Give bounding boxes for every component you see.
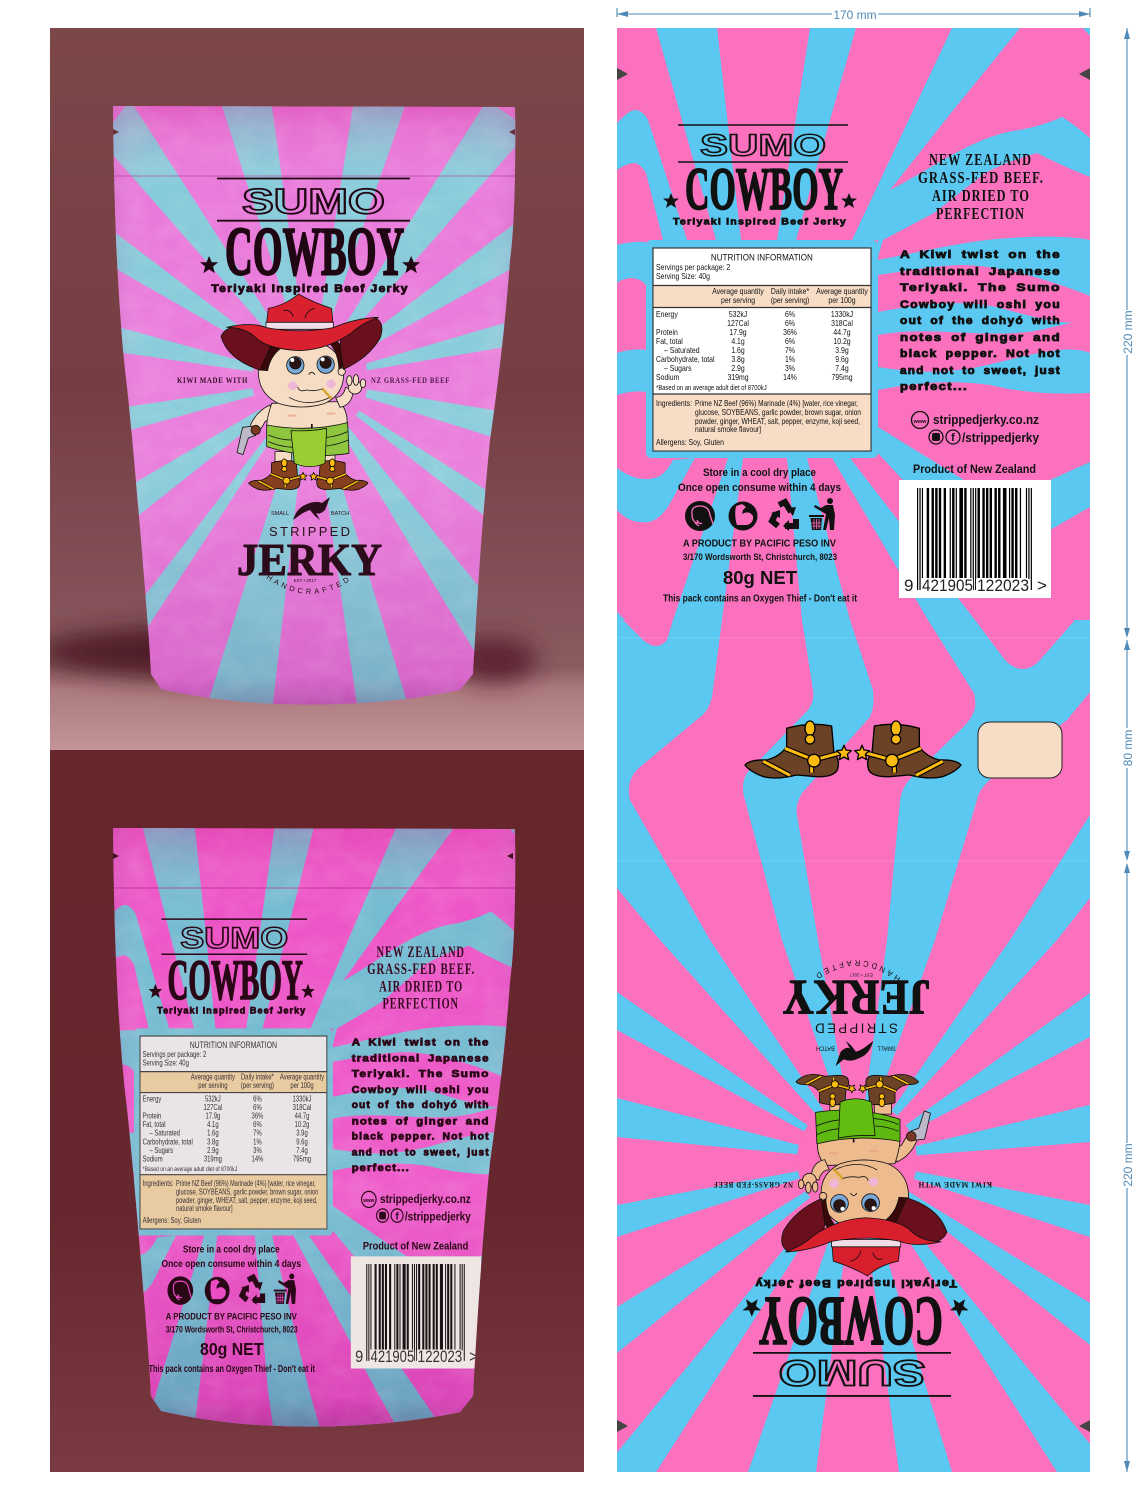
nutrition panel: – Sugars bbox=[664, 363, 692, 373]
headline: GRASS-FED BEEF. bbox=[367, 961, 475, 978]
nutrition panel: 1% bbox=[253, 1139, 262, 1147]
nutrition panel: – Sugars bbox=[149, 1147, 174, 1155]
company and weight: This pack contains an Oxygen Thief - Don't eat it bbox=[663, 594, 857, 604]
nutrition panel: 1330kJ bbox=[292, 1096, 312, 1104]
logo: Sumo Cowboy inverted bbox=[742, 1277, 969, 1396]
company and weight: A PRODUCT BY PACIFIC PESO INV bbox=[683, 538, 836, 550]
origin label: Product of New Zealand bbox=[913, 464, 1036, 476]
nutrition panel: 4.1g bbox=[207, 1122, 219, 1129]
logo: SUMO bbox=[180, 922, 288, 954]
company and weight: 3/170 Wordsworth St, Christchurch, 8023 bbox=[683, 552, 837, 563]
nutrition panel: Protein bbox=[656, 327, 678, 337]
tagline right: NZ GRASS-FED BEEF bbox=[371, 375, 450, 385]
upside-down front artwork bbox=[713, 960, 992, 1397]
nutrition panel: Sodium bbox=[656, 372, 679, 382]
web and social: www bbox=[362, 1199, 374, 1204]
company and weight: This pack contains an Oxygen Thief - Don't eat it bbox=[149, 1363, 315, 1374]
web and social: strippedjerky.co.nz bbox=[933, 412, 1039, 427]
icons: kiwi, muscle, recycle, bin bbox=[167, 1274, 296, 1305]
storage text bbox=[161, 1244, 302, 1270]
nutrition panel: 318Cal bbox=[293, 1104, 312, 1112]
nutrition panel: per serving bbox=[198, 1083, 228, 1091]
headline: PERFECTION bbox=[383, 995, 459, 1013]
description: Teriyaki. The Sumo bbox=[352, 1068, 490, 1080]
height dimension: 220 / 80 / 220 mm: 80 mm bbox=[1121, 730, 1135, 766]
logo: Sumo Cowboy inverted: SUMO bbox=[779, 1352, 925, 1393]
nutrition panel: 532kJ bbox=[729, 309, 747, 319]
logo: Stripped Jerky: JERKY bbox=[237, 534, 382, 585]
logo: Stripped Jerky: EST • 2017 bbox=[294, 578, 317, 583]
description bbox=[352, 1037, 490, 1174]
blank peach label bbox=[978, 722, 1062, 778]
description: A Kiwi twist on the bbox=[352, 1037, 490, 1049]
description: black pepper. Not hot bbox=[900, 348, 1061, 360]
character: baby sumo cowboy bbox=[221, 294, 382, 490]
nutrition panel: Energy bbox=[143, 1096, 162, 1104]
headline: GRASS-FED BEEF. bbox=[918, 168, 1044, 187]
nutrition panel: 3% bbox=[785, 363, 795, 373]
headline bbox=[368, 946, 474, 1008]
description: Teriyaki. The Sumo bbox=[900, 282, 1061, 294]
nutrition panel: Prime NZ Beef (96%) Marinade (4%) [water, rice vinegar, bbox=[176, 1180, 316, 1188]
nutrition panel: 6% bbox=[253, 1122, 262, 1129]
nutrition panel: 9.6g bbox=[835, 354, 849, 364]
logo: Stripped Jerky: STRIPPED bbox=[269, 524, 350, 539]
description: traditional Japanese bbox=[352, 1053, 490, 1065]
width dimension: 170 mm: 170 mm bbox=[833, 8, 877, 22]
height dimension: 220 / 80 / 220 mm bbox=[1121, 28, 1135, 1472]
logo: Stripped Jerky inverted: SMALL bbox=[877, 1044, 896, 1050]
nutrition panel: (per serving) bbox=[241, 1083, 274, 1091]
company and weight bbox=[149, 1311, 315, 1374]
company and weight: 80g NET bbox=[723, 567, 798, 588]
wavy rays artwork bbox=[109, 827, 515, 1437]
barcode: 9 bbox=[904, 576, 913, 595]
storage text: Once open consume within 4 days bbox=[678, 482, 841, 494]
company and weight bbox=[663, 538, 857, 604]
nutrition panel: Daily intake* bbox=[771, 286, 809, 296]
logo: Stripped Jerky inverted: HANDCRAFTED bbox=[816, 960, 900, 980]
barcode: 122023 bbox=[418, 1348, 462, 1366]
character inverted bbox=[782, 1075, 947, 1276]
logo: COWBOY bbox=[167, 949, 303, 1012]
headline: PERFECTION bbox=[936, 204, 1025, 223]
nutrition panel: Average quantity bbox=[816, 286, 868, 296]
web and social: /strippedjerky bbox=[405, 1210, 471, 1223]
nutrition panel bbox=[653, 248, 871, 451]
tagline inverted: NZ GRASS-FED BEEF bbox=[713, 1180, 793, 1190]
notch marks bbox=[617, 68, 1090, 1432]
logo: Stripped Jerky inverted: EST • 2017 bbox=[849, 971, 873, 977]
sunburst rays bbox=[97, 100, 531, 712]
nutrition panel: NUTRITION INFORMATION bbox=[711, 252, 813, 263]
nutrition panel: 3% bbox=[253, 1147, 262, 1155]
logo: Sumo Cowboy: SUMO bbox=[242, 182, 385, 221]
nutrition panel: 319mg bbox=[204, 1156, 222, 1164]
description: notes of ginger and bbox=[352, 1116, 490, 1128]
nutrition panel: 3.9g bbox=[835, 345, 849, 355]
nutrition panel: 795mg bbox=[831, 372, 853, 382]
nutrition panel: Servings per package: 2 bbox=[143, 1051, 206, 1059]
description: Cowboy will oshi you bbox=[352, 1085, 490, 1096]
nutrition panel: 14% bbox=[252, 1156, 263, 1164]
headline bbox=[918, 150, 1044, 223]
back label artwork bbox=[653, 125, 1061, 604]
web and social: f bbox=[396, 1211, 399, 1223]
nutrition panel: 7.4g bbox=[296, 1147, 308, 1155]
nutrition panel: Ingredients: bbox=[143, 1180, 174, 1188]
nutrition panel: 14% bbox=[783, 372, 797, 382]
back bag pouch bbox=[100, 820, 530, 1440]
logo: Stripped Jerky inverted: STRIPPED bbox=[815, 1020, 898, 1036]
nutrition panel: 532kJ bbox=[205, 1096, 221, 1104]
nutrition panel: glucose, SOYBEANS, garlic powder, brown sugar, onion bbox=[176, 1189, 318, 1197]
description: perfect... bbox=[352, 1162, 410, 1174]
nutrition panel: per serving bbox=[721, 295, 755, 305]
logo: COWBOY bbox=[685, 156, 843, 222]
barcode: > bbox=[469, 1348, 478, 1366]
nutrition panel: 10.2g bbox=[833, 336, 851, 346]
logo bbox=[149, 919, 315, 1016]
nutrition panel: 7% bbox=[253, 1130, 262, 1138]
nutrition panel: 1% bbox=[785, 354, 795, 364]
logo: Stripped Jerky: BATCH bbox=[331, 511, 349, 517]
description: and not to sweet, just bbox=[352, 1147, 490, 1159]
nutrition panel: 127Cal bbox=[727, 318, 749, 328]
nutrition panel: *Based on an average adult diet of 8700kJ bbox=[143, 1166, 237, 1173]
headline: AIR DRIED TO bbox=[932, 186, 1030, 205]
description: black pepper. Not hot bbox=[352, 1131, 490, 1143]
nutrition panel: 127Cal bbox=[204, 1104, 223, 1112]
notches bbox=[113, 129, 515, 135]
nutrition panel: glucose, SOYBEANS, garlic powder, brown sugar, onion bbox=[695, 407, 861, 417]
nutrition panel: 6% bbox=[785, 336, 795, 346]
nutrition panel: Allergens: Soy, Gluten bbox=[143, 1218, 201, 1225]
sunburst rays bottom panel bbox=[601, 940, 1113, 1472]
storage text: Store in a cool dry place bbox=[703, 467, 816, 479]
nutrition panel: powder, ginger, WHEAT, salt, pepper, enzyme, koji seed, bbox=[695, 416, 860, 426]
description: traditional Japanese bbox=[900, 266, 1061, 278]
nutrition panel: 1.6g bbox=[731, 345, 745, 355]
height dimension: 220 / 80 / 220 mm: 220 mm bbox=[1121, 310, 1135, 354]
headline: AIR DRIED TO bbox=[379, 978, 463, 996]
web and social: f bbox=[951, 432, 955, 444]
nutrition panel bbox=[140, 1036, 327, 1229]
icons: kiwi, muscle, recycle, bin bbox=[685, 498, 835, 531]
nutrition panel: 318Cal bbox=[831, 318, 853, 328]
nutrition panel: Carbohydrate, total bbox=[656, 354, 715, 364]
nutrition panel: 1.6g bbox=[207, 1130, 219, 1138]
nutrition panel: 10.2g bbox=[295, 1122, 310, 1129]
width dimension: 170 mm bbox=[617, 8, 1090, 22]
height dimension: 220 / 80 / 220 mm: 220 mm bbox=[1121, 1143, 1135, 1187]
tagline left: KIWI MADE WITH bbox=[177, 375, 248, 385]
barcode: 421905 bbox=[371, 1348, 414, 1366]
nutrition panel: – Saturated bbox=[149, 1130, 180, 1138]
company and weight: A PRODUCT BY PACIFIC PESO INV bbox=[166, 1311, 297, 1322]
panel: back bag mockup bbox=[50, 750, 584, 1472]
web and social: strippedjerky.co.nz bbox=[380, 1193, 471, 1206]
nutrition panel: (per serving) bbox=[771, 295, 810, 305]
nutrition panel: 44.7g bbox=[833, 327, 851, 337]
nutrition panel: 6% bbox=[253, 1096, 262, 1104]
logo: Stripped Jerky inverted bbox=[782, 960, 930, 1066]
description: perfect... bbox=[900, 381, 968, 393]
description: out of the dohyó with bbox=[352, 1100, 490, 1111]
panel: flat dieline artwork bbox=[617, 28, 1090, 1472]
logo: Teriyaki Inspired Beef Jerky bbox=[157, 1005, 306, 1016]
barcode: 9 bbox=[355, 1348, 363, 1366]
nutrition panel: 36% bbox=[783, 327, 797, 337]
barcode: 421905 bbox=[922, 576, 973, 595]
nutrition panel: Energy bbox=[656, 309, 678, 319]
nutrition panel: Fat, total bbox=[656, 336, 683, 346]
logo: Stripped Jerky: HANDCRAFTED bbox=[266, 576, 348, 594]
description: A Kiwi twist on the bbox=[900, 249, 1061, 261]
logo bbox=[663, 125, 857, 228]
nutrition panel: – Saturated bbox=[664, 345, 700, 355]
nutrition panel: Allergens: Soy, Gluten bbox=[656, 437, 724, 447]
nutrition panel: *Based on an average adult diet of 8700kJ bbox=[656, 385, 767, 392]
nutrition panel: Prime NZ Beef (96%) Marinade (4%) [water, rice vinegar, bbox=[695, 398, 858, 408]
origin label: Product of New Zealand bbox=[363, 1241, 468, 1253]
nutrition panel: 2.9g bbox=[207, 1147, 219, 1155]
logo: Stripped Jerky bbox=[237, 497, 382, 594]
tagline inverted: KIWI MADE WITH bbox=[918, 1180, 992, 1190]
nutrition panel: Average quantity bbox=[712, 286, 764, 296]
nutrition panel: Servings per package: 2 bbox=[656, 262, 730, 272]
description: out of the dohyó with bbox=[900, 315, 1061, 327]
web and social bbox=[362, 1191, 471, 1223]
barcode: > bbox=[1037, 576, 1047, 595]
description: Cowboy will oshi you bbox=[900, 299, 1061, 311]
logo: Stripped Jerky inverted: JERKY bbox=[783, 970, 930, 1025]
logo: Stripped Jerky: SMALL bbox=[271, 511, 289, 517]
nutrition panel: 7.4g bbox=[835, 363, 849, 373]
nutrition panel: Serving Size: 40g bbox=[656, 271, 710, 281]
nutrition panel: 6% bbox=[785, 318, 795, 328]
nutrition panel: 7% bbox=[785, 345, 795, 355]
company and weight: 3/170 Wordsworth St, Christchurch, 8023 bbox=[166, 1324, 298, 1335]
description: and not to sweet, just bbox=[900, 365, 1061, 377]
nutrition panel: Sodium bbox=[143, 1156, 163, 1164]
nutrition panel: 4.1g bbox=[731, 336, 745, 346]
nutrition panel: natural smoke flavour] bbox=[695, 424, 761, 434]
nutrition panel: 44.7g bbox=[295, 1113, 310, 1121]
logo: Sumo Cowboy: COWBOY bbox=[225, 213, 404, 289]
description bbox=[900, 249, 1061, 393]
web and social: www bbox=[913, 419, 927, 425]
logo: Stripped Jerky inverted: BATCH bbox=[816, 1044, 835, 1050]
nutrition panel: per 100g bbox=[290, 1083, 314, 1091]
nutrition panel: 17.9g bbox=[205, 1113, 220, 1121]
logo: Teriyaki Inspired Beef Jerky bbox=[673, 216, 847, 228]
nutrition panel: 9.6g bbox=[296, 1139, 308, 1147]
web and social bbox=[912, 412, 1040, 445]
logo: Sumo Cowboy inverted: COWBOY bbox=[759, 1282, 943, 1359]
logo: Sumo Cowboy: Teriyaki Inspired Beef Jerky bbox=[211, 283, 409, 295]
storage text: Store in a cool dry place bbox=[183, 1244, 280, 1256]
nutrition panel: 3.8g bbox=[207, 1139, 219, 1147]
nutrition panel: powder, ginger, WHEAT, salt, pepper, enzyme, koji seed, bbox=[176, 1198, 317, 1205]
nutrition panel: 17.9g bbox=[729, 327, 747, 337]
panel: front bag mockup bbox=[50, 28, 584, 750]
notches bbox=[113, 853, 513, 859]
nutrition panel: 3.9g bbox=[296, 1130, 308, 1138]
front bag pouch bbox=[113, 106, 516, 705]
nutrition panel: Daily intake* bbox=[241, 1074, 274, 1082]
nutrition panel: 3.8g bbox=[731, 354, 745, 364]
web and social: /strippedjerky bbox=[962, 430, 1040, 445]
barcode bbox=[899, 480, 1051, 598]
barcode bbox=[351, 1256, 481, 1368]
logo: Sumo Cowboy bbox=[200, 178, 420, 295]
nutrition panel: 1330kJ bbox=[831, 309, 853, 319]
barcode: 122023 bbox=[977, 576, 1029, 595]
logo: SUMO bbox=[700, 128, 826, 162]
headline: NEW ZEALAND bbox=[929, 150, 1032, 169]
nutrition panel: 36% bbox=[252, 1113, 263, 1121]
nutrition panel: Ingredients: bbox=[656, 398, 692, 408]
storage text: Once open consume within 4 days bbox=[161, 1258, 302, 1270]
nutrition panel: 2.9g bbox=[731, 363, 745, 373]
nutrition panel: 319mg bbox=[728, 372, 749, 382]
nutrition panel: Serving Size: 40g bbox=[143, 1060, 189, 1068]
nutrition panel: per 100g bbox=[828, 295, 856, 305]
nutrition panel: Fat, total bbox=[143, 1122, 166, 1129]
nutrition panel: natural smoke flavour] bbox=[176, 1205, 233, 1213]
headline: NEW ZEALAND bbox=[377, 943, 465, 961]
nutrition panel: 6% bbox=[785, 309, 795, 319]
description: notes of ginger and bbox=[900, 332, 1061, 344]
nutrition panel: 795mg bbox=[293, 1156, 311, 1164]
storage text bbox=[678, 467, 841, 494]
nutrition panel: Average quantity bbox=[191, 1074, 235, 1082]
nutrition panel: Carbohydrate, total bbox=[143, 1139, 193, 1147]
nutrition panel: Protein bbox=[143, 1113, 161, 1121]
back label artwork bbox=[140, 919, 490, 1374]
boots on gusset bbox=[745, 721, 961, 778]
logo: Sumo Cowboy inverted: Teriyaki Inspired Beef Jerky bbox=[754, 1277, 957, 1289]
nutrition panel: 6% bbox=[253, 1104, 262, 1112]
company and weight: 80g NET bbox=[200, 1339, 264, 1359]
nutrition panel: NUTRITION INFORMATION bbox=[190, 1040, 277, 1050]
nutrition panel: Average quantity bbox=[280, 1074, 325, 1082]
